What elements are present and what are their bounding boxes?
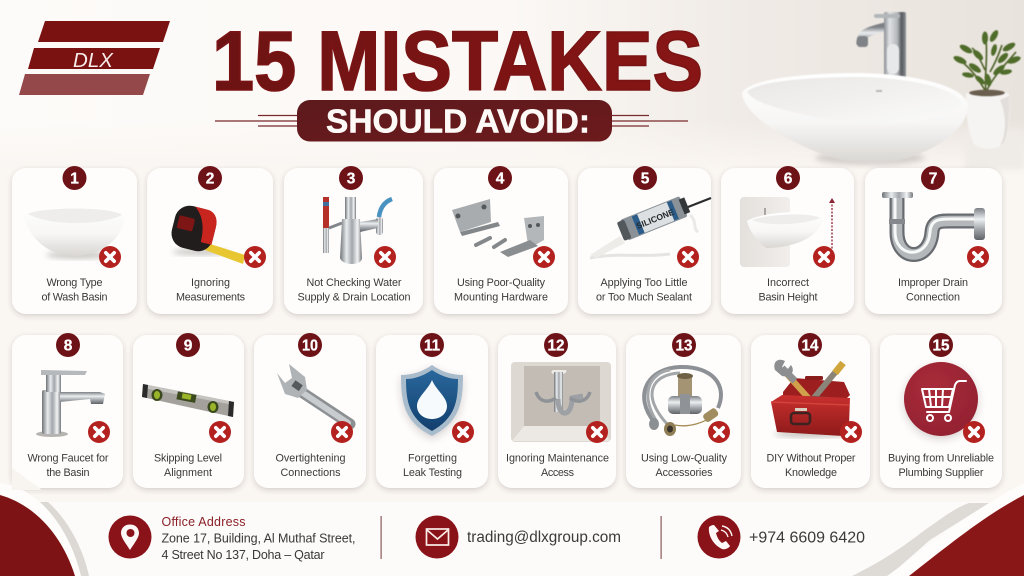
number 14: 14	[802, 338, 819, 354]
label: Access	[541, 467, 575, 479]
hero: plant and pot	[952, 29, 1022, 149]
label	[506, 452, 609, 479]
icon: brackets and screws	[452, 199, 544, 257]
icon: wrong mark	[840, 421, 862, 443]
card 14: diy without knowledge	[751, 333, 870, 488]
number 13	[672, 333, 696, 357]
icon: wrong mark	[813, 246, 835, 268]
email text: trading@dlxgroup.com	[467, 529, 621, 546]
row 1 cards	[12, 166, 1002, 314]
card 11: leak testing	[376, 333, 488, 488]
divider	[380, 516, 382, 559]
label: Mounting Hardware	[454, 292, 548, 304]
icon: envelope	[416, 516, 458, 558]
number 11: 11	[424, 338, 440, 354]
label: Ignoring	[191, 277, 230, 289]
icon: phone	[698, 516, 740, 558]
icon: sealant tube: SILICONE	[635, 207, 676, 231]
number 7	[921, 166, 945, 190]
icon: wrong mark	[708, 421, 730, 443]
card 10: wrench	[254, 333, 366, 488]
icon: wrong mark	[209, 421, 231, 443]
label: Wrong Faucet for	[28, 452, 109, 464]
card 2: ignoring measurements	[147, 166, 273, 314]
number 15: 15	[932, 338, 950, 354]
icon: wall-mounted basin	[740, 197, 835, 267]
label: Using Poor-Quality	[457, 277, 546, 289]
label: Using Low-Quality	[641, 452, 728, 464]
icon: wrong mark	[244, 246, 266, 268]
card 13: low-quality accessories	[626, 333, 741, 488]
address text: Zone 17, Building, Al Muthaf Street,	[162, 532, 356, 546]
number 13: 13	[676, 338, 693, 354]
footer band	[0, 502, 1024, 576]
icon: wrong mark	[99, 246, 121, 268]
contact: phone	[698, 516, 865, 558]
icon: wrong mark	[533, 246, 555, 268]
label	[403, 452, 462, 479]
icon: wrong mark	[963, 421, 985, 443]
number 3: 3	[347, 170, 356, 188]
number 4: 4	[496, 170, 505, 188]
icon: spirit level	[142, 384, 234, 417]
icon: wrong mark	[967, 246, 989, 268]
icon: wrong mark	[331, 421, 353, 443]
card 1: wrong type of wash basin	[12, 166, 137, 314]
label: Ignoring Maintenance	[506, 452, 609, 464]
icon: wrong mark	[586, 421, 608, 443]
icon: tape measure	[168, 203, 245, 264]
label	[176, 277, 246, 304]
icon: shield with water drop	[401, 365, 463, 436]
hero: faucet	[857, 12, 906, 80]
corner decoration: bottom left	[0, 468, 89, 576]
icon: sealant tube	[590, 195, 711, 258]
label: Leak Testing	[403, 467, 462, 479]
label	[276, 452, 346, 479]
label	[42, 277, 108, 304]
card 12: maintenance access	[498, 333, 616, 488]
label: Incorrect	[767, 277, 809, 289]
number 1	[62, 166, 86, 190]
label: Wrong Type	[46, 277, 102, 289]
label: Connections	[280, 467, 341, 479]
number 12	[544, 333, 568, 357]
number 2	[198, 166, 222, 190]
icon: wrong mark	[677, 246, 699, 268]
title: 15 MISTAKES	[212, 14, 703, 108]
address text: Office Address	[162, 515, 246, 529]
card 6: basin height	[721, 166, 854, 314]
label: Skipping Level	[154, 452, 222, 464]
number 9	[176, 333, 200, 357]
icon: adjustable wrench	[277, 364, 350, 424]
hero: wash basin	[742, 73, 968, 165]
row 2 cards	[12, 333, 1002, 488]
label: Plumbing Supplier	[898, 467, 984, 479]
icon: wrong mark	[374, 246, 396, 268]
number 6: 6	[784, 170, 793, 188]
subtitle pill: SHOULD AVOID:	[326, 102, 590, 140]
number 15	[929, 333, 953, 357]
label: Knowledge	[785, 467, 837, 479]
corner decoration: bottom right	[852, 483, 1024, 576]
number 7: 7	[929, 170, 937, 188]
card 8: wrong faucet	[12, 333, 123, 488]
icon: water supply and drain	[323, 197, 392, 264]
phone text: +974 6609 6420	[749, 530, 865, 546]
icon: wrong mark	[88, 421, 110, 443]
icon: faucet	[36, 370, 105, 437]
label: Measurements	[176, 292, 246, 304]
address text: 4 Street No 137, Doha – Qatar	[162, 548, 324, 562]
label: Supply & Drain Location	[298, 292, 410, 304]
label: Buying from Unreliable	[888, 452, 994, 464]
number 2: 2	[206, 170, 214, 188]
icon: location pin	[108, 516, 152, 558]
label: of Wash Basin	[42, 292, 108, 304]
icon: toolbox	[771, 360, 850, 437]
label: Overtightening	[276, 452, 346, 464]
number 8: 8	[64, 338, 73, 354]
card 5: sealant	[578, 166, 711, 314]
card 7: drain connection	[865, 166, 1002, 314]
number 11	[420, 333, 444, 357]
number 5: 5	[641, 170, 650, 188]
icon: braided hoses and fitting	[644, 367, 721, 436]
divider	[660, 516, 662, 559]
label: Basin Height	[758, 292, 818, 304]
label: Improper Drain	[898, 277, 968, 289]
number 12: 12	[548, 338, 564, 354]
number 10	[298, 333, 322, 357]
icon: p-trap	[882, 192, 985, 254]
icon: shopping cart in circle	[904, 362, 978, 436]
label	[766, 452, 856, 479]
label	[641, 452, 728, 479]
address text	[162, 515, 356, 562]
label	[28, 452, 109, 479]
number 4	[488, 166, 512, 190]
number 1: 1	[70, 170, 79, 188]
label: Accessories	[656, 467, 713, 479]
label: Alignment	[164, 467, 212, 479]
number 8	[56, 333, 80, 357]
label: or Too Much Sealant	[596, 292, 692, 304]
label: Forgetting	[408, 452, 457, 464]
label	[154, 452, 222, 479]
card 9: level	[133, 333, 244, 488]
label: DIY Without Proper	[766, 452, 856, 464]
card 3: not checking water supply	[284, 166, 423, 314]
number 14	[798, 333, 822, 357]
label	[596, 277, 692, 304]
number 5	[633, 166, 657, 190]
number 6	[776, 166, 800, 190]
card 15: unreliable supplier	[880, 333, 1002, 488]
number 3	[339, 166, 363, 190]
contact: office address	[108, 515, 356, 562]
icon: basin	[24, 207, 125, 258]
icon: wrong mark	[452, 421, 474, 443]
card 4: poor-quality mounting hardware	[434, 166, 568, 314]
subtitle pill	[215, 100, 688, 142]
label: the Basin	[46, 467, 90, 479]
logo: DLX: DLX	[73, 49, 114, 72]
icon: under-sink cabinet	[511, 362, 611, 442]
label	[888, 452, 994, 479]
label	[898, 277, 968, 304]
number 10: 10	[302, 338, 318, 354]
contact: email	[416, 516, 621, 558]
label: Connection	[906, 292, 960, 304]
number 9: 9	[184, 338, 193, 354]
logo: DLX	[19, 21, 170, 95]
label	[758, 277, 818, 304]
label	[298, 277, 410, 304]
label	[454, 277, 548, 304]
label: Not Checking Water	[306, 277, 402, 289]
label: Applying Too Little	[600, 277, 688, 289]
